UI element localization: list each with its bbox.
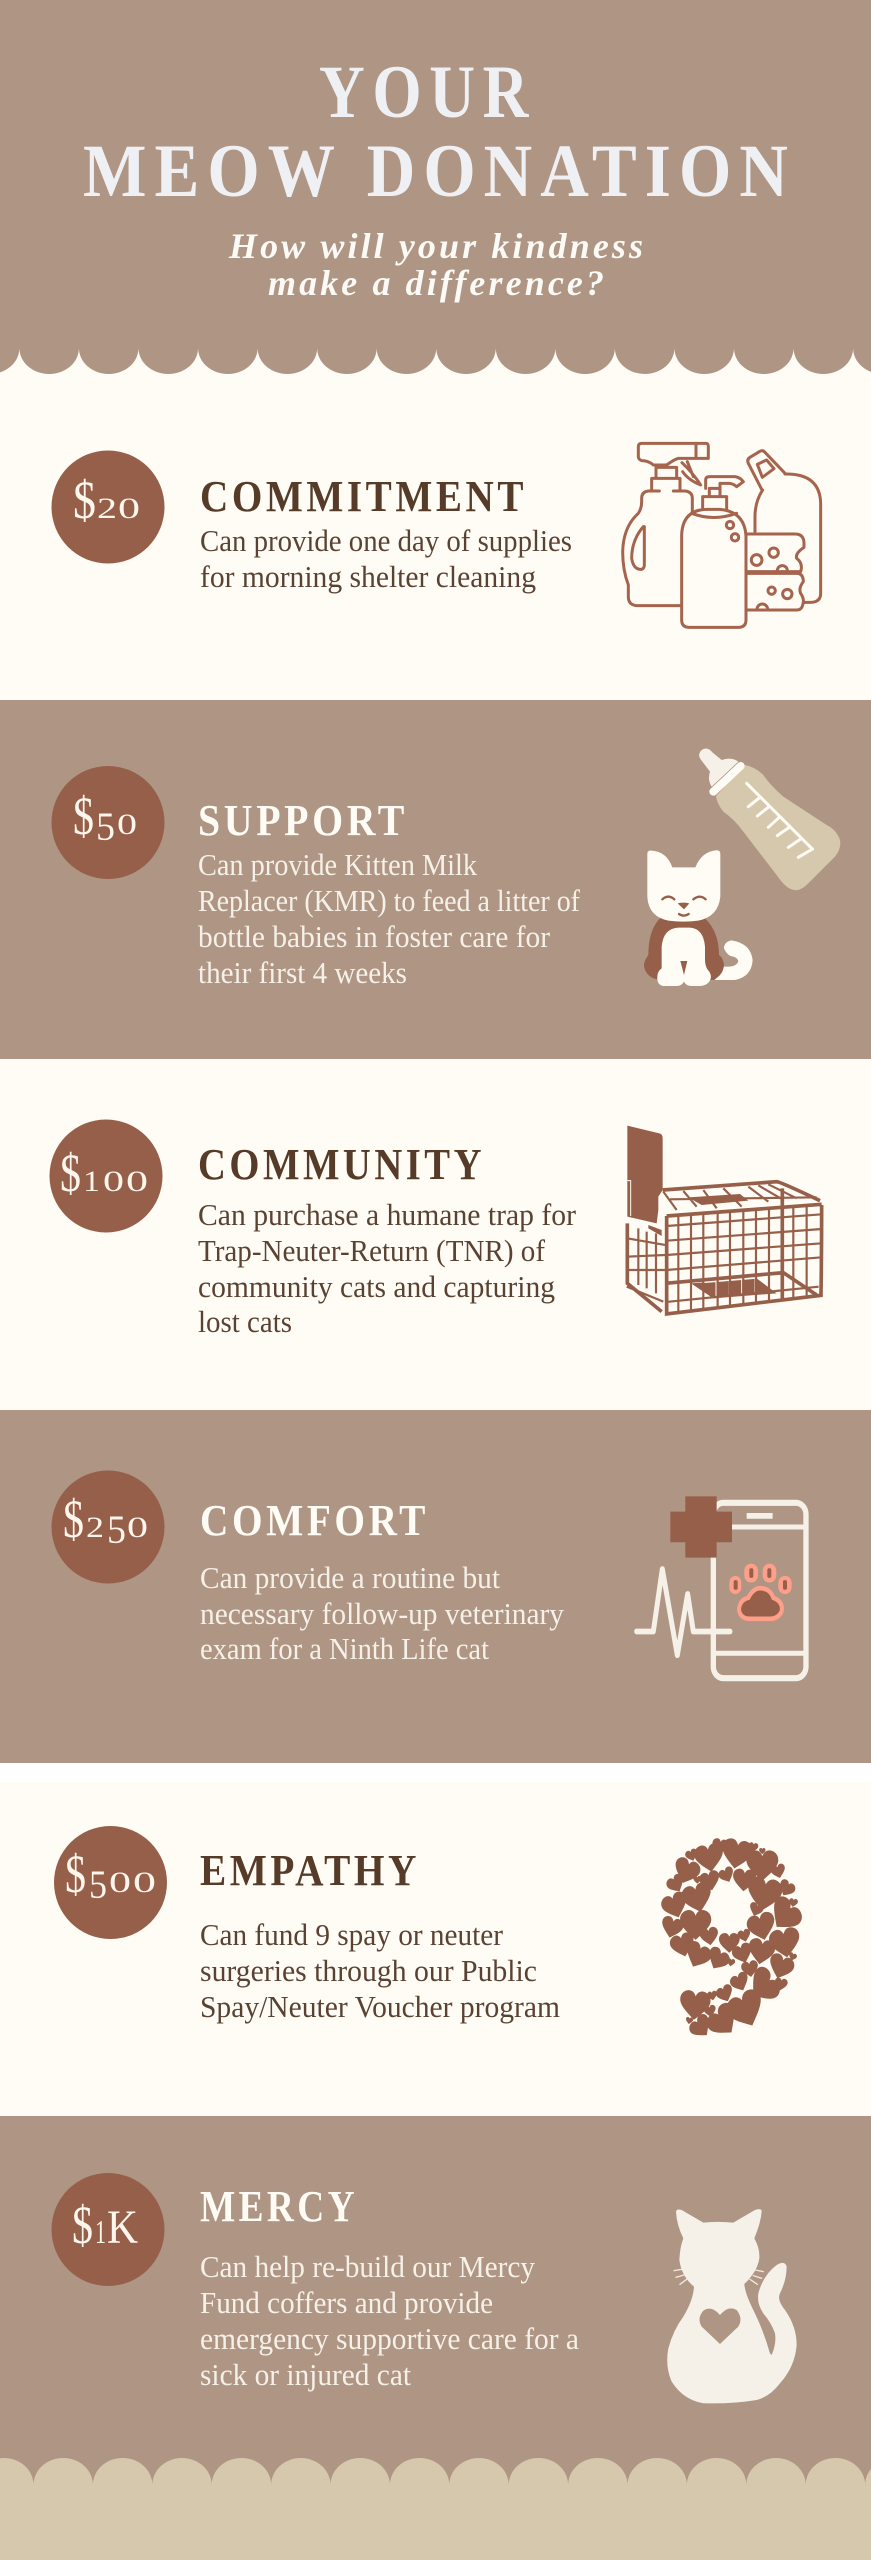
description: their first 4 weeks — [198, 955, 407, 990]
amount badge: $20 — [52, 450, 164, 564]
amount badge: $250: 2 — [86, 1511, 104, 1544]
icon: paw print — [729, 1564, 792, 1619]
amount badge: $50: 0 — [117, 808, 137, 841]
amount badge: $1K — [52, 2173, 164, 2286]
heading: COMMITMENT — [200, 472, 527, 521]
white strip — [0, 1763, 871, 1782]
panel: mercy — [0, 2116, 871, 2488]
description — [198, 847, 581, 990]
amount badge: $1K: 1 — [95, 2214, 106, 2251]
amount badge: $100: 0 — [103, 1165, 124, 1198]
heading: COMMUNITY — [198, 1140, 485, 1189]
title: YOUR — [319, 51, 536, 134]
icon: medical cross — [670, 1496, 732, 1558]
icon: cleaning supplies — [623, 443, 821, 627]
icon: kitten and milk bottle — [644, 748, 840, 986]
description: surgeries through our Public — [200, 1953, 537, 1988]
amount badge: $50: $ — [73, 786, 94, 846]
amount badge: $50: 5 — [96, 804, 115, 849]
description: Can purchase a humane trap for — [198, 1197, 577, 1232]
amount badge: $50 — [52, 766, 164, 879]
amount badge: $20: 0 — [118, 492, 140, 525]
amount badge: $100: 0 — [126, 1165, 148, 1198]
amount badge: $500: 5 — [89, 1862, 107, 1907]
amount badge: $1K: $ — [72, 2195, 93, 2255]
description — [200, 523, 572, 594]
description: community cats and capturing — [198, 1269, 555, 1304]
amount badge: $500 — [54, 1826, 167, 1939]
icon: cat with heart — [667, 2209, 797, 2403]
description: lost cats — [198, 1304, 292, 1339]
description: Can provide one day of supplies — [200, 523, 572, 558]
panel: commitment — [52, 443, 821, 627]
amount badge: $250: $ — [63, 1489, 84, 1549]
title: MEOW DONATION — [83, 130, 796, 213]
description — [198, 1197, 577, 1339]
description: Fund coffers and provide — [200, 2285, 493, 2320]
heading: EMPATHY — [200, 1846, 420, 1895]
description — [200, 2249, 579, 2392]
icon: vet phone with paw — [637, 1496, 806, 1678]
amount badge: $100 — [50, 1120, 162, 1232]
amount badge: $250 — [52, 1470, 164, 1584]
panel: empathy — [54, 1826, 805, 2044]
amount badge: $250: 0 — [127, 1511, 148, 1544]
icon: pulse line — [637, 1569, 730, 1655]
title — [83, 51, 796, 213]
description: exam for a Ninth Life cat — [200, 1631, 489, 1666]
description: Trap-Neuter-Return (TNR) of — [198, 1233, 546, 1268]
description: Can provide Kitten Milk — [198, 847, 477, 882]
panel: comfort — [0, 1410, 871, 1763]
icon: humane trap — [627, 1126, 822, 1314]
description: Can help re-build our Mercy — [200, 2249, 535, 2284]
description: Spay/Neuter Voucher program — [200, 1989, 560, 2024]
subtitle: How will your kindness — [228, 226, 643, 266]
description: bottle babies in foster care for — [198, 919, 551, 954]
amount badge: $1K: K — [107, 2201, 138, 2254]
heading: COMFORT — [200, 1496, 429, 1545]
panel: support — [0, 700, 871, 1059]
amount badge: $500: 0 — [133, 1866, 156, 1899]
description: Replacer (KMR) to feed a litter of — [198, 883, 581, 918]
icon: number nine made of hearts — [659, 1837, 805, 2044]
subtitle — [228, 226, 643, 303]
amount badge: $250: 5 — [107, 1507, 126, 1552]
description: necessary follow-up veterinary — [200, 1596, 564, 1631]
panel: header — [0, 0, 871, 374]
description: Can fund 9 spay or neuter — [200, 1917, 504, 1952]
subtitle: make a difference? — [268, 263, 604, 303]
icon: phone — [713, 1503, 806, 1678]
description: for morning shelter cleaning — [200, 559, 536, 594]
panel: community — [50, 1120, 822, 1339]
icon: bottle — [699, 748, 840, 890]
description: Can provide a routine but — [200, 1560, 500, 1595]
amount badge: $100: 1 — [83, 1165, 100, 1198]
description: emergency supportive care for a — [200, 2321, 579, 2356]
amount badge: $500: 0 — [109, 1866, 131, 1899]
icon: kitten — [644, 850, 753, 986]
description — [200, 1917, 560, 2024]
amount badge: $20: 2 — [97, 492, 117, 525]
footer scallops — [0, 2458, 871, 2560]
heading: MERCY — [200, 2182, 358, 2231]
amount badge: $100: $ — [60, 1143, 81, 1203]
amount badge: $20: $ — [73, 470, 96, 530]
description — [200, 1560, 564, 1666]
description: sick or injured cat — [200, 2357, 411, 2392]
amount badge: $500: $ — [65, 1844, 86, 1904]
heading: SUPPORT — [198, 796, 408, 845]
